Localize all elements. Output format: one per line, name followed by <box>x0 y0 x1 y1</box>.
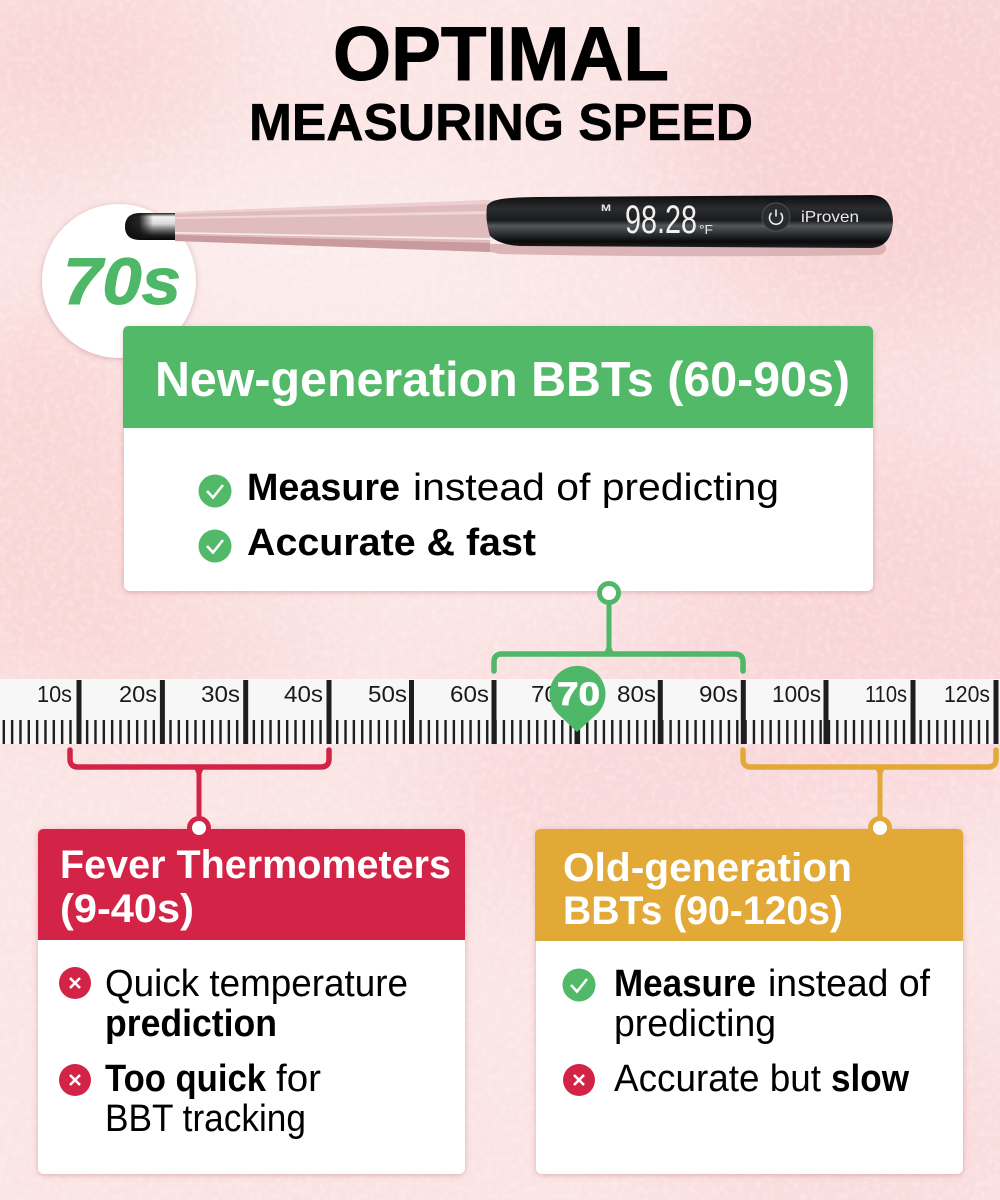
panel: fever thermometers <box>38 829 465 1174</box>
marker pin: 70: 70 <box>557 676 600 712</box>
panel: new-generation BBTs <box>123 326 873 591</box>
icon: check <box>198 530 232 562</box>
ruler labels: 80s <box>617 681 656 707</box>
thermometer tip <box>125 213 176 240</box>
thermometer display: °F <box>699 222 713 237</box>
ruler <box>0 679 1000 744</box>
text: measure instead of predicting: Measure <box>614 963 756 1005</box>
heading: fever thermometers: (9-40s) <box>60 887 194 931</box>
thermometer display: 98.28 <box>625 198 697 242</box>
text: too quick for BBT tracking: BBT tracking <box>105 1098 306 1140</box>
power button <box>762 203 790 231</box>
ruler labels: 110s <box>865 681 907 707</box>
heading: new-generation <box>123 326 873 428</box>
thermometer display: M <box>601 203 611 213</box>
icon: cross <box>563 1064 595 1096</box>
badge: 70s: 70s <box>63 244 181 318</box>
heading: old-generation: BBTs (90-120s) <box>563 889 843 933</box>
heading: fever thermometers <box>38 829 465 940</box>
text: measure instead of predicting: Measure <box>247 467 400 509</box>
bracket: gold <box>743 750 996 838</box>
thermometer black body <box>486 195 893 248</box>
thermometer <box>125 195 893 256</box>
thermometer display <box>601 198 859 242</box>
text: measure instead of predicting: predicting <box>614 1003 776 1045</box>
ruler labels <box>37 681 990 707</box>
ruler labels: 120s <box>944 681 990 707</box>
title: MEASURING SPEED <box>249 94 753 152</box>
badge: 70s <box>42 204 196 358</box>
ruler labels: 70s <box>531 681 570 707</box>
text: quick temperature prediction: prediction <box>105 1003 277 1045</box>
heading: old-generation: Old-generation <box>563 846 852 890</box>
thermometer shadow <box>490 244 886 256</box>
ruler labels: 30s <box>201 681 240 707</box>
heading: fever thermometers: Fever Thermometers <box>60 843 451 887</box>
title: OPTIMAL <box>333 12 669 97</box>
panel: old-generation BBTs <box>535 829 963 1174</box>
text: measure instead of predicting <box>614 963 930 1045</box>
ruler minor ticks <box>3 720 1000 744</box>
text: quick temperature prediction: Quick temperature <box>105 963 408 1005</box>
title <box>249 12 753 152</box>
text: accurate and fast: Accurate & fast <box>247 522 536 564</box>
text: measure instead of predicting: instead of <box>768 963 930 1005</box>
ruler labels: 50s <box>368 681 407 707</box>
heading: new-generation: New-generation BBTs (60-90s) <box>155 353 850 407</box>
icon: cross <box>59 967 91 999</box>
text: too quick for BBT tracking <box>105 1058 321 1140</box>
ruler labels: 90s <box>699 681 738 707</box>
icon: check <box>198 474 232 508</box>
text: too quick for BBT tracking: for <box>276 1058 321 1100</box>
text: quick temperature prediction <box>105 963 408 1045</box>
ruler labels: 20s <box>119 681 157 707</box>
marker pin: 70 <box>550 666 606 732</box>
bracket: green <box>494 584 743 671</box>
thermometer display: iProven <box>801 209 859 226</box>
ruler labels: 100s <box>772 681 821 707</box>
text: accurate but slow: slow <box>831 1058 909 1100</box>
text: too quick for BBT tracking: Too quick <box>105 1058 267 1100</box>
text: accurate but slow: Accurate but <box>614 1058 821 1100</box>
thermometer pink body <box>175 200 490 252</box>
ruler major ticks <box>79 680 996 744</box>
ruler labels: 10s <box>37 681 72 707</box>
icon: check <box>562 968 596 1002</box>
bracket: red <box>70 750 329 838</box>
icon: cross <box>59 1064 91 1096</box>
text: measure instead of predicting: instead of predicting <box>413 467 779 509</box>
ruler labels: 60s <box>450 681 489 707</box>
text: measure instead of predicting <box>247 467 779 509</box>
heading: old-generation <box>535 829 963 941</box>
ruler labels: 40s <box>284 681 323 707</box>
